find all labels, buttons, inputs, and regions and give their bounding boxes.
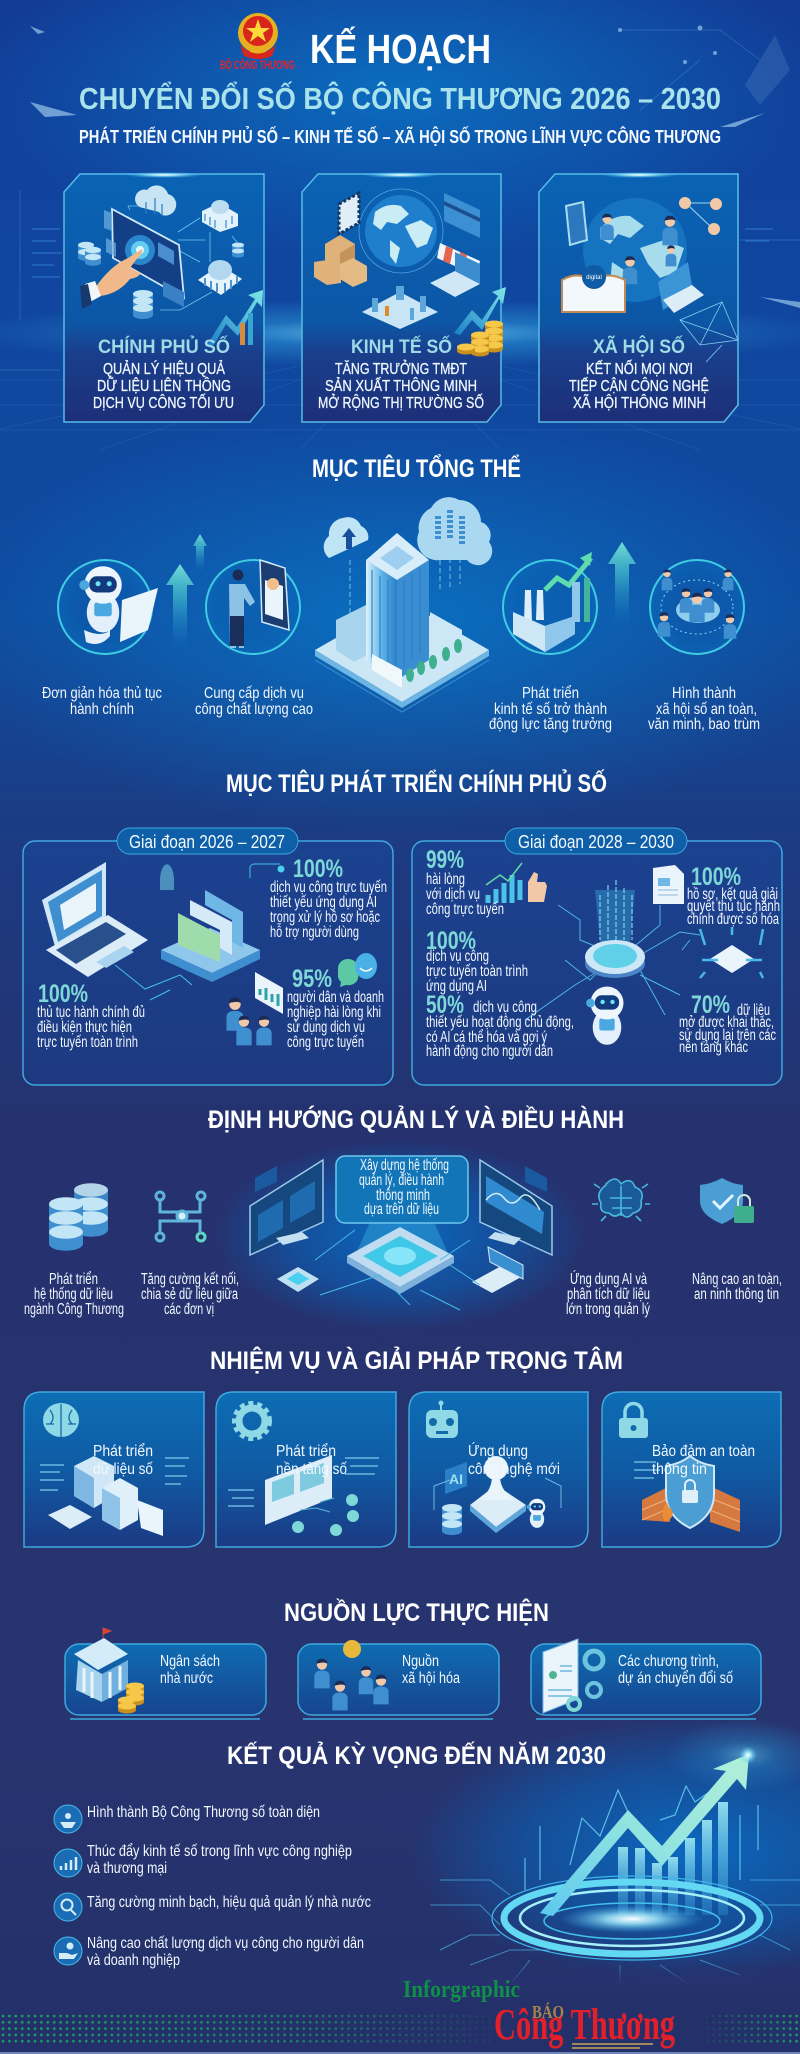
icon: smart factory [362,286,438,329]
label: information security [692,1271,782,1303]
arrow: growth [166,564,194,650]
stat: 100% services: dịch vụ công trực tuyến [270,879,387,896]
lines [318,359,484,412]
chart illustration: growth hologram [400,1718,800,1985]
text: Tăng cường minh bạch, hiệu quả quản lý nhà nước [87,1894,371,1911]
label: data system: hệ thống dữ liệu [34,1286,113,1303]
panel: chính phủ số [64,172,264,422]
text: và doanh nghiệp [87,1952,180,1969]
pill heading [505,828,687,854]
icon: people network [600,197,722,284]
icon: community network [650,560,744,654]
heading: mục tiêu tổng thể: MỤC TIÊU TỔNG THỂ [312,453,521,483]
icon: factory growth [503,552,597,654]
stat: 95% satisfaction: công trực tuyến [287,1034,364,1051]
stat: 100% procedures: trực tuyến toàn trình [37,1034,138,1051]
label: digital economy [489,684,612,733]
stat: 100% services [270,855,387,941]
stat: 95% satisfaction: 95% [292,965,332,993]
label: data system: ngành Công Thương [24,1301,124,1318]
icon: AI brain [592,1179,650,1221]
icon: laptop [658,262,704,313]
label: data system: Phát triển [49,1271,98,1288]
stat: 100% AI [426,927,528,995]
icon: government buildings [198,200,242,295]
illustration: firewall shield [634,1456,740,1532]
circuit lines [128,206,240,310]
icon: rising arrow [207,290,263,345]
circuit traces [430,1880,800,1985]
bars [618,1802,728,1915]
thin spark lines [525,1786,758,1890]
stat: 100% records: 100% [691,863,741,891]
icon: smartphone [566,202,587,245]
stat: 50%: 50% [426,991,464,1019]
label: digital society: văn minh, bao trùm [648,716,760,733]
stat: 100% procedures [37,980,145,1051]
callout: smart management: thông minh [376,1187,430,1204]
section: management direction [24,1140,782,1330]
panel: ứng dụng công nghệ mới [409,1392,588,1547]
icon: digital economy growth [54,1849,82,1877]
icon: cloud [135,185,176,216]
stat: 70%: nền tảng khác [679,1039,748,1056]
list: expected results [54,1804,371,1969]
lines: QUẢN LÝ HIỆU QUẢ [103,359,225,378]
icon: digital skill book: digital [586,275,602,281]
text: và thương mại [87,1860,167,1877]
text: Nâng cao chất lượng dịch vụ công cho người dân [87,1935,364,1952]
icon: digital skill book [562,265,625,312]
lines [569,358,709,412]
heading: CHÍNH PHỦ SỐ [98,336,230,358]
icon: robot head [426,1400,458,1438]
text [87,1935,364,1969]
stat: 99%: 99% [426,846,464,874]
label: dữ liệu số [93,1461,153,1478]
header: ministry name: BỘ CÔNG THƯƠNG [220,57,295,72]
label: AI analytics: phân tích dữ liệu [567,1286,650,1303]
stat: 99%: công trực tuyến [426,901,504,918]
pill heading: Giai đoạn 2028 – 2030 [518,832,674,852]
panel: các chương trình, dự án [531,1639,761,1719]
label: Nguồn [402,1653,439,1670]
callout: smart management: quản lý, điều hành [359,1172,444,1189]
lines: DỮ LIỆU LIÊN THÔNG [97,375,231,395]
label: xã hội hóa [402,1670,460,1687]
icon: parcels [314,235,367,287]
stat: 50%: có AI cá thể hóa và gợi ý [426,1029,547,1046]
panel: kinh tế số [302,172,506,422]
stat: 100% services: thiết yếu ứng dụng AI [270,894,377,911]
lines: TIẾP CẬN CÔNG NGHỆ [569,376,709,395]
label: data sharing: chia sẻ dữ liệu giữa [141,1286,238,1303]
label: Ngân sách [160,1653,220,1670]
label [402,1653,460,1687]
pill heading [117,828,298,854]
label: Phát triển [93,1443,153,1460]
decorative green dots [2,2014,798,2043]
lines: XÃ HỘI THÔNG MINH [573,392,706,412]
lines [93,359,234,412]
icon: connection nodes [156,1192,205,1241]
icon: chart and thumbs up [486,863,547,903]
stat: 100% services: trong xử lý hồ sơ hoặc [270,909,380,926]
label: data sharing [141,1271,239,1318]
icon: network nodes [680,302,738,362]
icon: brain [43,1403,79,1437]
stat: 100% procedures: thủ tục hành chính đủ [37,1004,145,1021]
icon: padlock [619,1404,648,1438]
stat: 50% [426,991,574,1060]
stat: 99%: hài lòng [426,871,465,888]
stat: 100% procedures: 100% [38,980,88,1008]
stat: 100% AI: 100% [426,927,476,955]
stat: 99% [426,846,504,918]
icon: coins [457,320,503,356]
panel: ngân sách nhà nước [65,1628,266,1719]
label: Bảo đảm an toàn [652,1443,755,1460]
label: digital economy: động lực tăng trưởng [489,716,612,733]
panel: giai đoạn 2028-2030 [412,828,782,1085]
stat: 70%: dữ liệu [737,1002,770,1019]
icon: databases [78,242,244,319]
title: KẾ HOẠCH [310,26,491,72]
lines: SẢN XUẤT THÔNG MINH [325,376,477,395]
text [87,1842,352,1877]
panel: xã hội số [539,172,738,422]
label: quality services [195,685,313,718]
callout: smart management: dựa trên dữ liệu [364,1201,439,1218]
logo: báo công thương: Công Thương [494,2000,675,2049]
label [618,1653,733,1687]
stat: 50%: hành động cho người dân [426,1043,553,1060]
stat: 50%: dịch vụ công [473,999,537,1016]
stat: 95% satisfaction: sử dụng dịch vụ [287,1019,365,1036]
icon: bank card [444,193,480,238]
icon: robot [586,986,624,1045]
label: digital economy: Phát triển [522,684,579,702]
circuit lines [525,905,700,1020]
icon: database stack [49,1183,108,1251]
icon: chip [700,927,763,978]
stat: 70% [679,991,776,1056]
stat: 100% services: hỗ trợ người dùng [270,924,359,941]
label: nhà nước [160,1670,213,1687]
icon: gear [234,1403,270,1439]
icon: rising arrow [454,287,506,335]
icon: data cloud [417,497,492,565]
stat: 100% records [687,863,780,928]
panel: giai đoạn 2026-2027 [23,828,393,1085]
heading: XÃ HỘI SỐ [593,336,685,358]
label: simplify procedures [42,685,162,718]
icon: upload cloud [324,517,368,558]
lines: MỞ RỘNG THỊ TRƯỜNG SỐ [318,392,484,412]
icon: globe [359,189,443,273]
illustration: AI core: AI [449,1471,463,1487]
arrow: society growth [608,542,636,627]
label: digital society [648,685,760,733]
stat: 95% satisfaction: nghiệp hài lòng khi [287,1004,381,1021]
rings [492,1876,772,1960]
stat: 50%: thiết yếu hoạt động chủ động, [426,1014,574,1031]
label: simplify procedures: hành chính [70,701,134,718]
lines: KẾT NỐI MỌI NƠI [586,358,693,378]
icon: globe [583,198,687,302]
icon: hand [80,249,142,309]
icon: chat bubbles [338,953,377,987]
lines: DỊCH VỤ CÔNG TỐI ƯU [93,392,234,412]
heading: nguồn lực thực hiện: NGUỒN LỰC THỰC HIỆN [284,1597,549,1627]
icon: connector dot [278,866,284,872]
icon: digital ministry [54,1805,82,1833]
arrow: small growth [193,534,207,572]
label: quality services: Cung cấp dịch vụ [204,685,304,702]
label: digital society: Hình thành [672,685,736,702]
icon: QR code [339,193,359,234]
credit: infographic: Inforgraphic [403,1977,520,2003]
stat: 95% satisfaction: người dân và doanh [287,989,384,1006]
centre glow [564,1906,700,1932]
label: Phát triển [276,1443,336,1460]
callout: smart management [336,1156,468,1223]
panel: nguồn xã hội hóa [298,1640,499,1719]
stat: 100% AI: dịch vụ công [426,948,489,965]
label: Các chương trình, [618,1653,719,1670]
heading: KINH TẾ SỐ [351,336,452,358]
header: emblem [238,13,278,59]
panel: phát triển dữ liệu số [24,1392,204,1547]
icon: document [653,865,684,904]
icon: folders on server [160,864,260,982]
illustration: AI core [434,1456,561,1535]
label: data sharing: Tăng cường kết nối, [141,1271,239,1288]
icon: public service hand [54,1937,82,1965]
label [652,1443,755,1478]
arrow [540,1754,749,1916]
icon: citizens [226,998,272,1045]
label: data system [24,1271,124,1318]
heading: nhiệm vụ và giải pháp trọng tâm: NHIỆM VỤ VÀ GIẢI PHÁP TRỌNG TÂM [210,1345,623,1375]
lines: TĂNG TRƯỞNG TMĐT [335,359,467,378]
label [276,1443,347,1478]
label: digital society: xã hội số an toàn, [656,701,757,718]
icon: touch tablet [104,209,184,307]
label: data sharing: các đơn vị [164,1301,214,1318]
label [93,1443,153,1478]
icon: laptop [42,862,148,977]
heading: kết quả kỳ vọng: KẾT QUẢ KỲ VỌNG ĐẾN NĂM 2030 [227,1740,606,1770]
illustration: smart building [315,533,489,712]
subtitle: CHUYỂN ĐỔI SỐ BỘ CÔNG THƯƠNG 2026 – 2030 [79,80,721,116]
arrow tip glow [740,1747,756,1764]
icon: chart board [255,972,283,1014]
icon: transparency magnifier [54,1893,82,1921]
label [160,1653,220,1687]
pill heading: Giai đoạn 2026 – 2027 [129,832,285,852]
callout: smart management: Xây dựng hệ thống [360,1157,449,1174]
stat: 100% procedures: điều kiện thực hiện [37,1019,132,1036]
stat: 100% AI: ứng dụng AI [426,978,487,995]
stat: 95% satisfaction [287,965,384,1051]
illustration: servers [40,1456,189,1536]
label: digital economy: kinh tế số trở thành [494,701,607,718]
label: công nghệ mới [468,1461,560,1478]
label: AI analytics: lớn trong quản lý [566,1301,650,1318]
stat: 100% AI: trực tuyến toàn trình [426,963,528,980]
label: dự án chuyển đổi số [618,1669,733,1687]
panel: bảo đảm an toàn thông tin [602,1392,781,1547]
stat: 100% services: 100% [293,855,343,883]
icon: program clipboard and gears [543,1639,603,1713]
icon: state bank [74,1628,144,1714]
icon: investors and coin [314,1640,389,1710]
logo: báo công thương [494,2000,675,2049]
icon: citizen with phone [206,560,300,654]
label [468,1443,560,1478]
heading: định hướng quản lý và điều hành: ĐỊNH HƯỚNG QUẢN LÝ VÀ ĐIỀU HÀNH [208,1104,624,1134]
logo: báo công thương: BÁO [532,2001,564,2022]
icon: AI robot circle [58,560,158,654]
stat: 70%: 70% [691,991,730,1019]
text: Thúc đẩy kinh tế số trong lĩnh vực công nghiệp [87,1842,352,1860]
label: thông tin [652,1461,707,1478]
heading: mục tiêu phát triển chính phủ số: MỤC TIÊU PHÁT TRIỂN CHÍNH PHỦ SỐ [226,768,607,798]
label: Ứng dụng [468,1443,528,1460]
label: nền tảng số [276,1461,347,1478]
icon: online store [430,243,480,297]
icon: security shield [700,1178,754,1224]
label: AI analytics: Ứng dụng AI và [570,1271,647,1288]
label: simplify procedures: Đơn giản hóa thủ tục [42,685,162,702]
text: Hình thành Bộ Công Thương số toàn diện [87,1804,320,1821]
section: overall goals [42,497,760,733]
fade [470,1962,740,1985]
illustration: smart control center [215,1140,585,1330]
illustration: platform screen [228,1455,379,1536]
label: quality services: công chất lượng cao [195,701,313,718]
icon: central core [585,880,645,978]
panel: phát triển nền tảng số [216,1392,396,1547]
stat: 99%: với dịch vụ [426,886,480,903]
label: AI analytics [566,1271,650,1318]
